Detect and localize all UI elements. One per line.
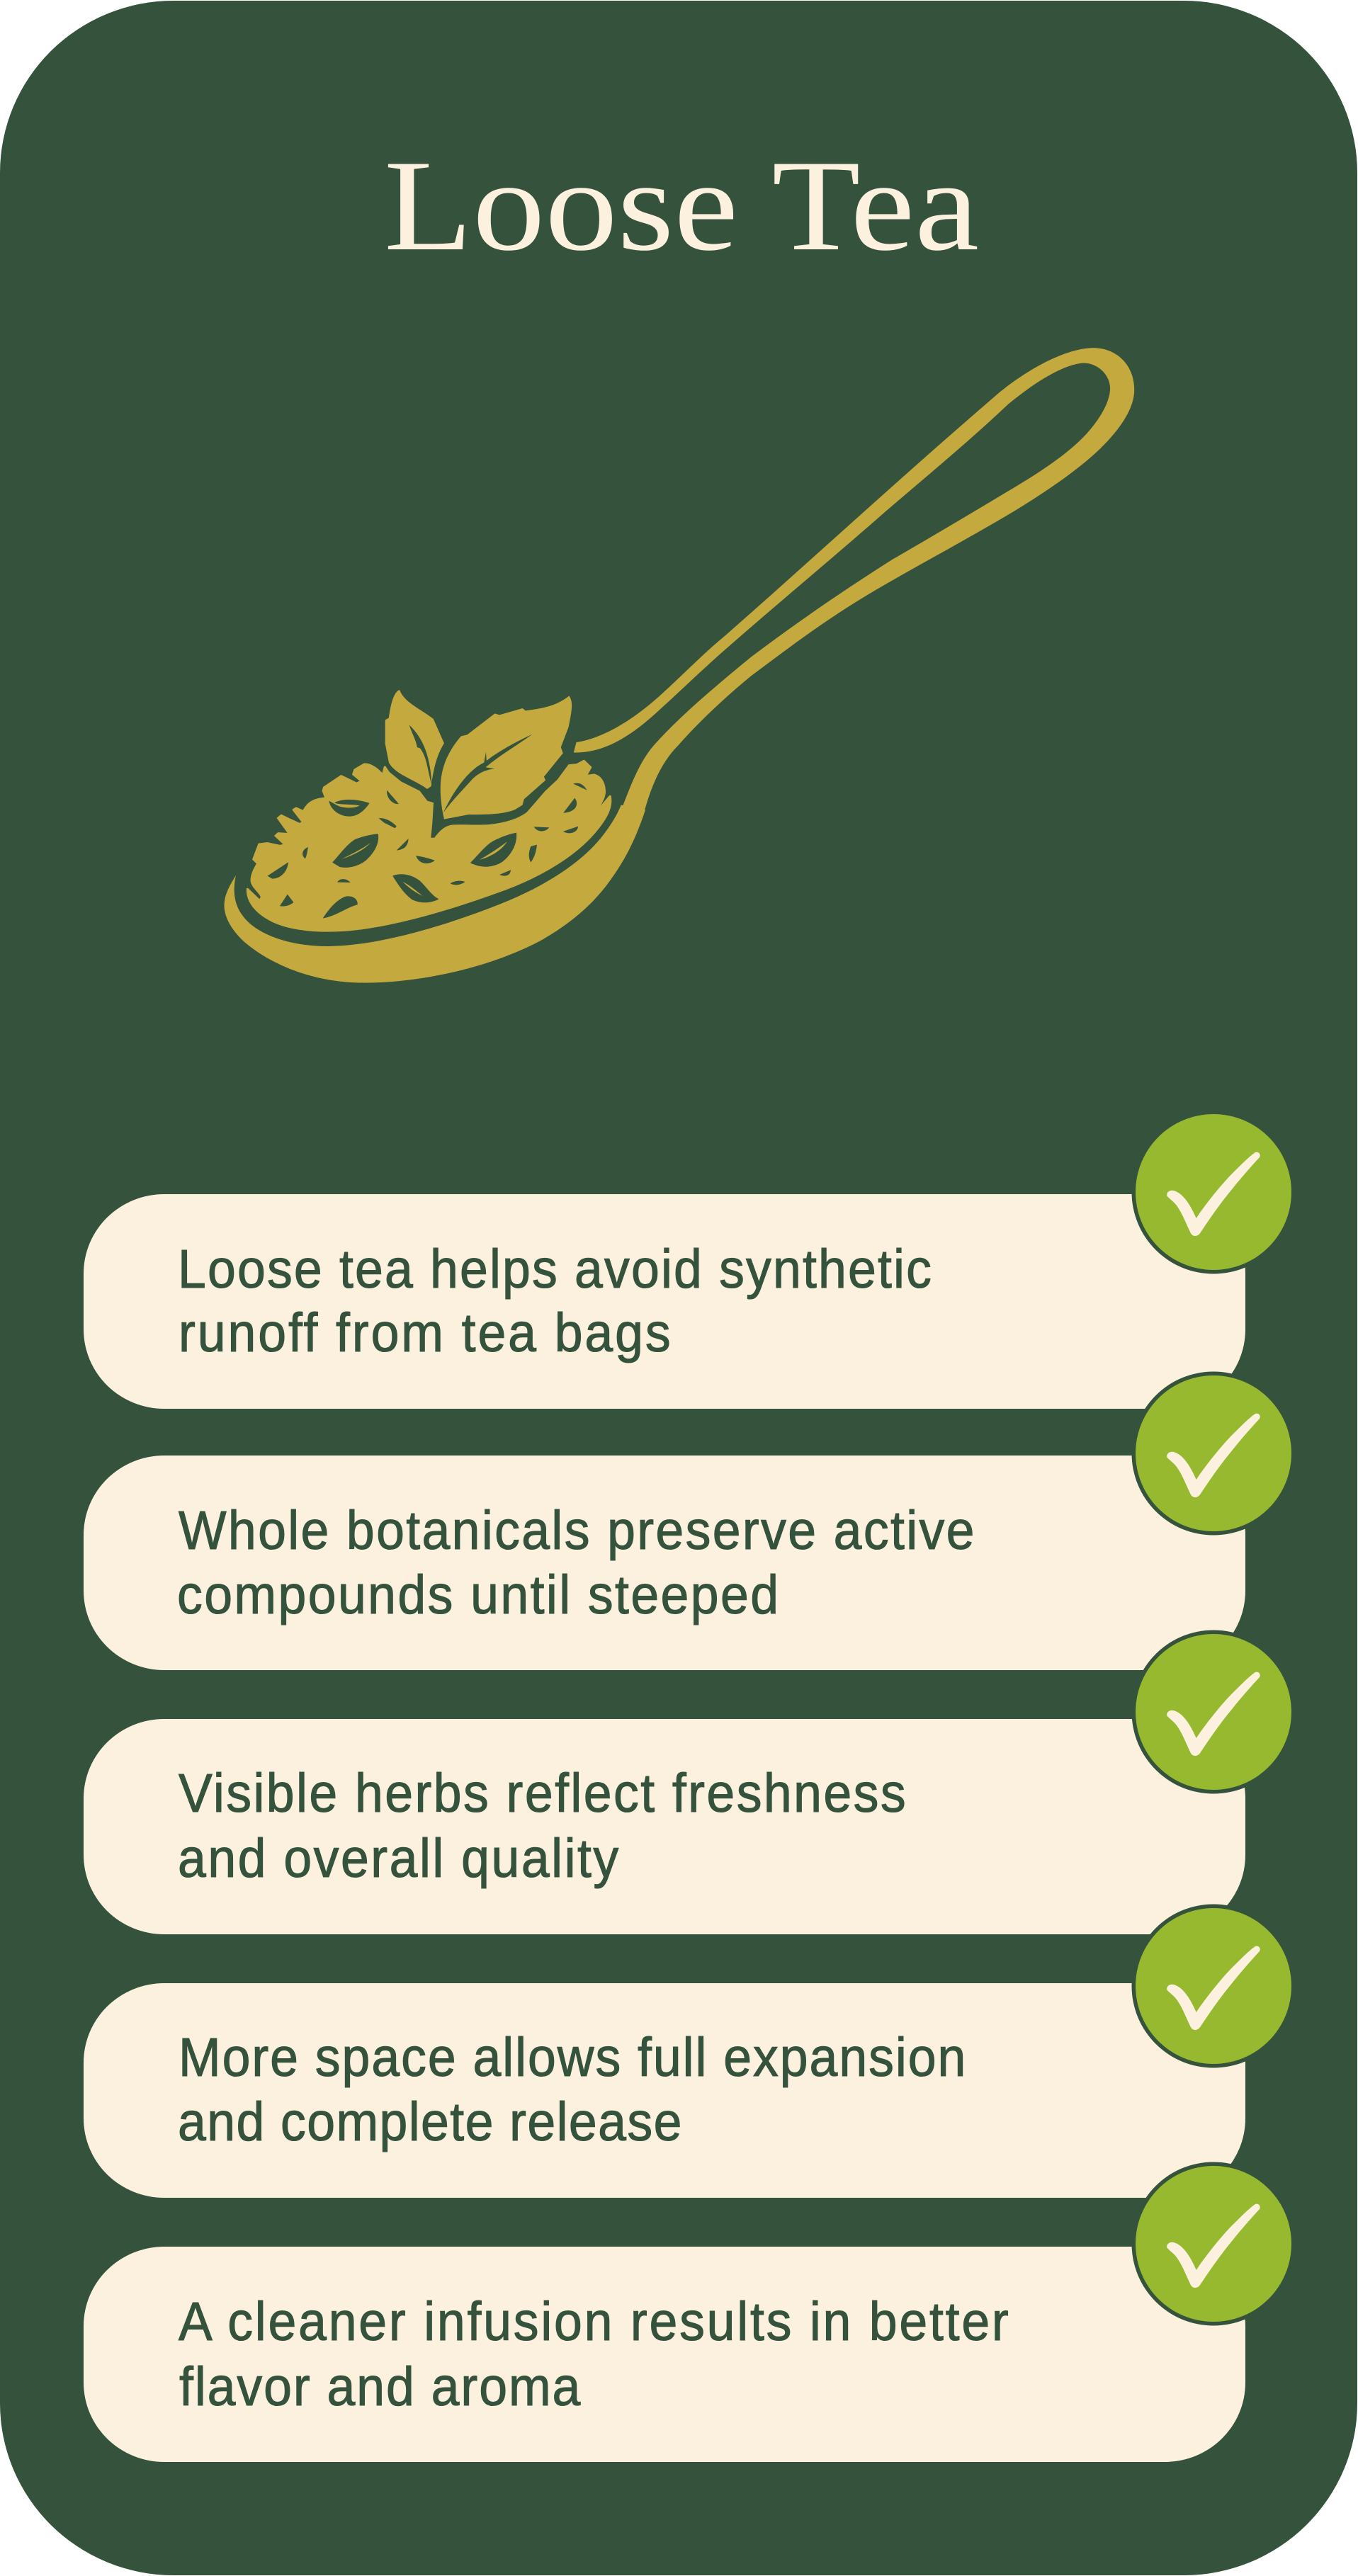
card text line 2: flavor and aroma: [179, 2356, 581, 2417]
card text line 2: compounds until steeped: [177, 1565, 779, 1625]
left leaf vein: [409, 725, 432, 785]
benefit card 2: [84, 1456, 1245, 1670]
tea leaf cutouts: [268, 783, 587, 919]
spoon handle: [574, 348, 1134, 815]
icon: check badge 4: [1132, 1904, 1295, 2068]
spoon bowl: [225, 805, 645, 983]
benefit card 5: [84, 2247, 1245, 2462]
tea mound: [247, 761, 611, 931]
right leaf: [441, 696, 572, 819]
card text line 1: Visible herbs reflect freshness: [179, 1763, 906, 1824]
card text line 2: runoff from tea bags: [179, 1303, 671, 1363]
benefit card 4: [84, 1983, 1245, 2198]
card background: [84, 2247, 1245, 2462]
benefit card 3: [84, 1719, 1245, 1934]
card text line 2: and overall quality: [178, 1828, 619, 1889]
card background: [84, 1983, 1245, 2198]
card background: [84, 1194, 1245, 1409]
right leaf vein: [443, 734, 532, 813]
card text line 2: and complete release: [178, 2092, 681, 2152]
card text line 1: A cleaner infusion results in better: [179, 2291, 1009, 2352]
card background: [84, 1456, 1245, 1670]
card background: [84, 1719, 1245, 1934]
title: Loose Tea: [384, 133, 979, 278]
left leaf: [385, 690, 444, 789]
card text line 1: Whole botanicals preserve active: [179, 1500, 974, 1561]
icon: check badge 1: [1132, 1111, 1295, 1273]
card text line 1: More space allows full expansion: [179, 2027, 966, 2088]
spoon bowl and tea: [225, 690, 645, 983]
card text line 1: Loose tea helps avoid synthetic: [178, 1239, 932, 1300]
benefit card 1: [84, 1194, 1245, 1409]
icon: check badge 5: [1132, 2162, 1295, 2326]
icon: golden spoon with loose tea leaves: [225, 348, 1134, 983]
icon: check badge 3: [1132, 1630, 1295, 1793]
icon: check badge 2: [1132, 1371, 1295, 1536]
